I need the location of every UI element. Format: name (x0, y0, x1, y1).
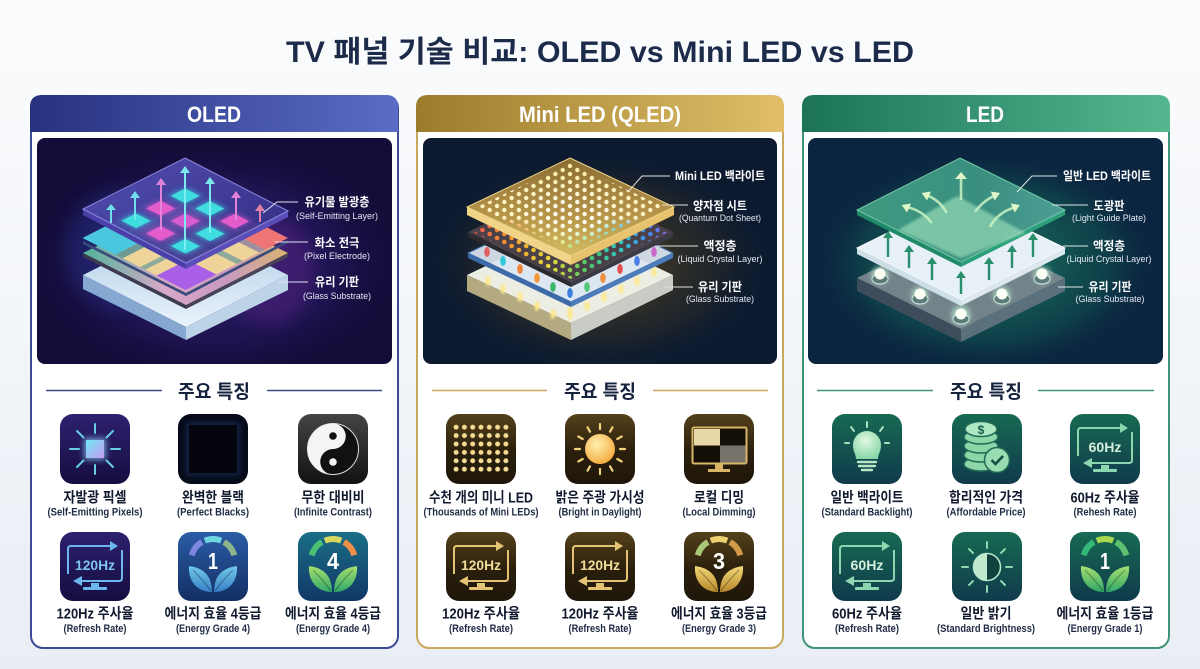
label: Mini LED backlight (628, 169, 765, 192)
light arrows (106, 166, 265, 250)
icon: 60Hz monitor second: 60Hz (850, 557, 884, 573)
icon: sun (565, 414, 635, 484)
feature: 60Hz refresh rate: 60Hz 주사율 (1070, 490, 1140, 506)
icon: energy badge gold: 3 (713, 548, 725, 574)
icon: yin yang (298, 414, 368, 484)
feature: energy grade 1: (Energy Grade 1) (1068, 623, 1143, 635)
icon: half sun (952, 532, 1022, 601)
feature: perfect blacks: (Perfect Blacks) (177, 506, 249, 518)
feature: standard backlight: 일반 백라이트 (830, 490, 904, 506)
header bar LED: LED (966, 102, 1004, 127)
header bar LED (802, 95, 1170, 132)
curved light arrows (906, 176, 1016, 227)
feature: standard backlight: (Standard Backlight) (822, 506, 913, 518)
panel card Mini LED (417, 96, 783, 648)
label: pixel electrode: (Pixel Electrode) (304, 251, 370, 262)
feature: energy grade 3 (671, 532, 767, 635)
icon: 120Hz monitor gold: 120Hz (461, 557, 501, 573)
label: quantum dot sheet: (Quantum Dot Sheet) (679, 213, 761, 224)
label: glass substrate (665, 279, 754, 305)
feature: energy grade 3: (Energy Grade 3) (682, 623, 756, 635)
label: glass substrate: 유리 기판 (315, 274, 359, 289)
label: pixel electrode (275, 235, 370, 262)
label: liquid crystal layer (657, 239, 762, 265)
icon: 120Hz monitor gold second: 120Hz (580, 557, 620, 573)
feature: local dimming: 로컬 디밍 (694, 490, 744, 506)
label: liquid crystal layer (1063, 239, 1152, 265)
feature: perfect blacks (177, 414, 249, 518)
feature: 120Hz refresh rate: (Refresh Rate) (64, 623, 127, 635)
icon: LED dot grid (446, 414, 516, 484)
label: liquid crystal layer: 액정층 (1093, 239, 1125, 253)
feature: energy grade 3: 에너지 효율 3등급 (671, 606, 767, 622)
feature: energy grade 4 (blue badge showing 1) (164, 532, 262, 635)
feature: energy grade 4 (blue badge showing 1): 에너지 효율 4등급 (164, 606, 262, 622)
label: standard LED backlight: 일반 LED 백라이트 (1063, 169, 1151, 183)
icon: 120Hz monitor: 120Hz (75, 557, 115, 573)
green arrows (883, 231, 1038, 294)
layer diagram Mini LED (423, 138, 777, 364)
rainbow dot layer (468, 224, 673, 287)
feature: 120Hz refresh rate (442, 532, 520, 635)
feature: 120Hz refresh rate: 120Hz 주사율 (442, 606, 520, 622)
label: glass substrate: 유리 기판 (1088, 279, 1132, 294)
feature: bright in daylight (556, 414, 644, 518)
header bar OLED (30, 95, 398, 132)
liquid crystal layer (468, 204, 673, 307)
panel: LED (802, 95, 1170, 648)
feature: local dimming (682, 414, 756, 518)
feature: standard brightness: (Standard Brightness) (937, 623, 1035, 635)
header bar Mini LED (416, 95, 784, 132)
icon: dimming monitor (684, 414, 754, 484)
label: quantum dot sheet: 양자점 시트 (693, 199, 747, 213)
panel card LED (803, 96, 1169, 648)
header bar Mini LED: Mini LED (QLED) (519, 102, 681, 127)
icon: energy badge teal: 4 (327, 548, 339, 574)
feature: 120Hz refresh rate second (562, 532, 638, 635)
feature: energy grade 1 (1056, 532, 1154, 635)
panel: Mini LED (416, 95, 784, 648)
label: glass substrate: (Glass Substrate) (303, 291, 371, 302)
label: pixel electrode: 화소 전극 (314, 235, 360, 250)
feature: 120Hz refresh rate (56, 532, 134, 635)
quantum dot sheet with LEDs (466, 158, 675, 265)
feature: infinite contrast: (Infinite Contrast) (294, 506, 372, 518)
feature: energy grade 4 (285, 532, 381, 635)
arrow heads (902, 172, 1020, 212)
feature: perfect blacks: 완벽한 블랙 (182, 490, 244, 506)
feature: standard brightness (937, 532, 1035, 635)
feature: self-emitting pixels (48, 414, 143, 518)
icon: black square (178, 414, 248, 484)
label: glass substrate: (Glass Substrate) (1076, 294, 1144, 305)
feature: 60Hz refresh rate: (Rehesh Rate) (1074, 506, 1137, 518)
icon: energy badge blue: 1 (208, 548, 218, 574)
feature: energy grade 4: 에너지 효율 4등급 (285, 606, 381, 622)
feature: affordable price: 합리적인 가격 (949, 490, 1023, 506)
label: self-emitting layer (263, 194, 378, 222)
icon: energy badge green: 1 (1100, 548, 1110, 574)
label: quantum dot sheet (662, 199, 761, 224)
section heading Mini LED: 주요 특징 (564, 381, 636, 403)
label: liquid crystal layer: (Liquid Crystal Layer) (1066, 254, 1152, 265)
feature: bright in daylight: (Bright in Daylight) (558, 506, 642, 518)
label: standard LED backlight (1017, 169, 1151, 192)
feature: 120Hz refresh rate: (Refresh Rate) (449, 623, 513, 635)
panel card OLED (31, 96, 398, 648)
title: TV 패널 기술 비교: OLED vs Mini LED vs LED (286, 36, 914, 69)
feature: thousands of mini LEDs: (Thousands of Mini LEDs) (424, 506, 539, 518)
icon: light bulb (832, 414, 902, 484)
feature: standard backlight (822, 414, 913, 518)
label: glass substrate (1058, 279, 1144, 305)
feature: infinite contrast (294, 414, 372, 518)
feature: energy grade 1: 에너지 효율 1등급 (1056, 606, 1154, 622)
label: light guide plate: (Light Guide Plate) (1072, 213, 1146, 224)
feature: 120Hz refresh rate: 120Hz 주사율 (56, 606, 134, 622)
label: light guide plate (1052, 199, 1146, 224)
feature: energy grade 4: (Energy Grade 4) (296, 623, 370, 635)
label: self-emitting layer: (Self-Emitting Layer) (296, 211, 378, 222)
header bar OLED: OLED (187, 102, 241, 127)
label: glass substrate (278, 274, 371, 302)
tan layer (83, 202, 288, 309)
glass substrate layer (467, 226, 673, 340)
glass substrate layer (83, 224, 288, 340)
label: glass substrate: 유리 기판 (698, 279, 742, 294)
feature: 120Hz refresh rate second: (Refresh Rate) (568, 623, 632, 635)
feature: 60Hz refresh rate (1070, 414, 1140, 518)
feature: standard brightness: 일반 밝기 (960, 606, 1012, 622)
feature: local dimming: (Local Dimming) (682, 506, 756, 518)
feature: energy grade 4 (blue badge showing 1): (Energy Grade 4) (176, 623, 250, 635)
feature: infinite contrast: 무한 대비비 (302, 490, 364, 506)
icon: coins with check: $ (978, 423, 985, 437)
icon: 60Hz monitor: 60Hz (1088, 439, 1122, 455)
glass substrate with LEDs (857, 227, 1065, 342)
panel: OLED (30, 95, 398, 648)
label: liquid crystal layer: (Liquid Crystal Layer) (678, 254, 762, 265)
feature: self-emitting pixels: 자발광 픽셀 (64, 490, 126, 506)
label: glass substrate: (Glass Substrate) (686, 294, 754, 305)
label: Mini LED backlight: Mini LED 백라이트 (675, 169, 765, 183)
layer diagram LED (808, 138, 1163, 364)
feature: affordable price (946, 414, 1026, 518)
feature: thousands of mini LEDs: 수천 개의 미니 LED (429, 490, 533, 506)
liquid crystal layer (857, 197, 1065, 306)
pixel electrode layer (82, 186, 288, 296)
light guide plate (857, 158, 1065, 267)
feature: 60Hz refresh rate second: 60Hz 주사율 (832, 606, 902, 622)
feature: 120Hz refresh rate second: 120Hz 주사율 (562, 606, 638, 622)
section heading LED: 주요 특징 (950, 381, 1022, 403)
icon: glowing pixel (60, 414, 130, 484)
label: self-emitting layer: 유기물 발광층 (304, 194, 370, 209)
feature: self-emitting pixels: (Self-Emitting Pixels) (48, 506, 143, 518)
layer diagram OLED (37, 138, 392, 364)
feature: 60Hz refresh rate second: (Refresh Rate) (835, 623, 899, 635)
feature: 60Hz refresh rate second (832, 532, 902, 635)
self-emitting layer plate (83, 158, 288, 269)
section heading OLED: 주요 특징 (178, 381, 250, 403)
label: light guide plate: 도광판 (1094, 199, 1124, 213)
feature: thousands of mini LEDs (424, 414, 539, 518)
label: liquid crystal layer: 액정층 (704, 239, 736, 253)
feature: affordable price: (Affordable Price) (946, 506, 1026, 518)
feature: bright in daylight: 밝은 주광 가시성 (556, 490, 644, 506)
